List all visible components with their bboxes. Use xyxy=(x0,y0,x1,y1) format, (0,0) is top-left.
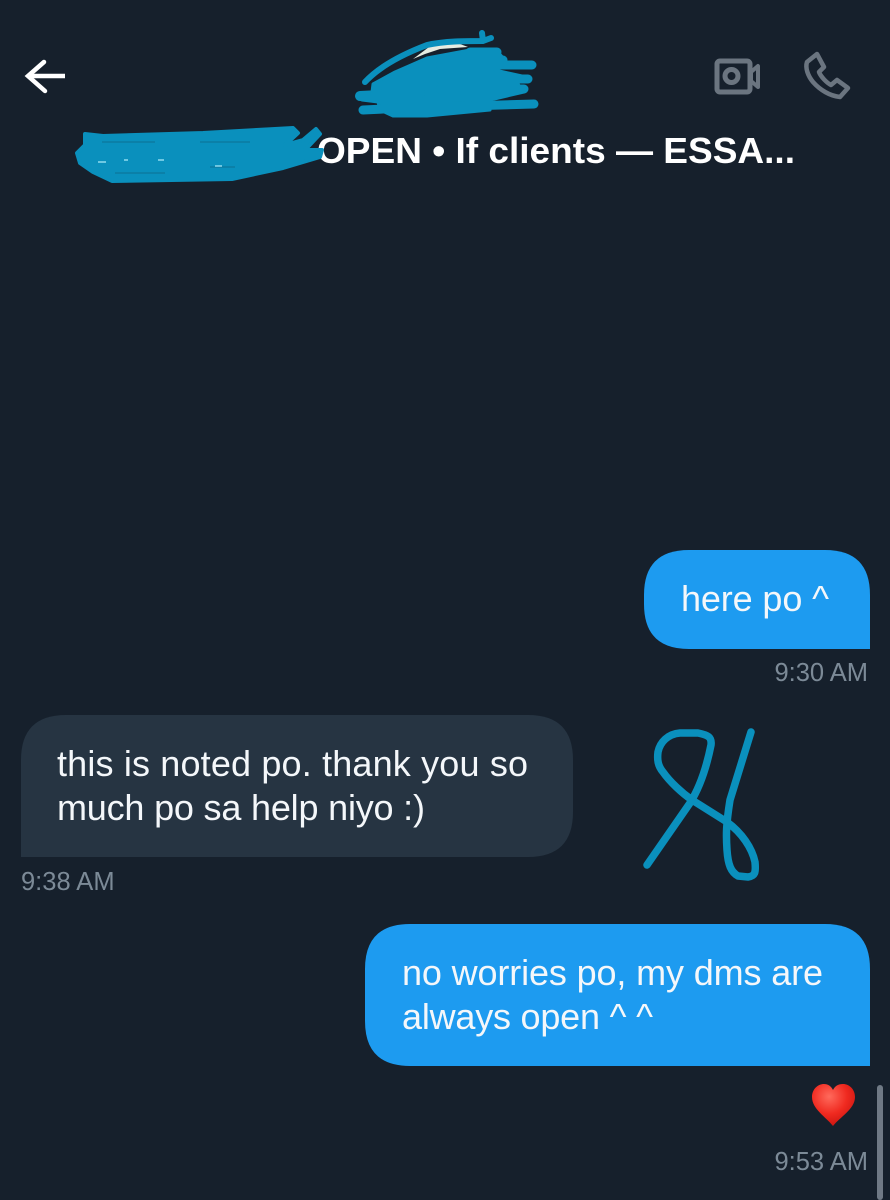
handwritten scribble xyxy=(647,732,755,877)
icon: video call xyxy=(717,61,758,92)
message bubble: this is noted xyxy=(21,715,573,857)
message bubble: no worries: no worries po, my dms are xyxy=(402,952,823,993)
icon: phone xyxy=(806,54,848,97)
redacted name scribble xyxy=(77,128,322,181)
message bubble: no worries xyxy=(365,924,870,1066)
message bubble: here po xyxy=(644,550,870,649)
redacted avatar scribble xyxy=(360,33,534,116)
message bubble: this is noted: much po sa help niyo :) xyxy=(57,787,425,828)
timestamp 9:53 AM: 9:53 AM xyxy=(774,1148,868,1176)
icon: heart reaction xyxy=(812,1084,855,1126)
timestamp 9:38 AM: 9:38 AM xyxy=(21,868,115,896)
message bubble: this is noted: this is noted po. thank you so xyxy=(57,743,528,784)
message bubble: here po: here po ^ xyxy=(681,578,829,619)
message bubble: no worries: always open ^ ^ xyxy=(402,996,653,1037)
icon: back arrow xyxy=(28,62,65,91)
group title: OPEN • If clients — ESSA... xyxy=(317,130,795,171)
timestamp 9:30 AM: 9:30 AM xyxy=(774,659,868,687)
scrollbar xyxy=(877,1085,883,1200)
